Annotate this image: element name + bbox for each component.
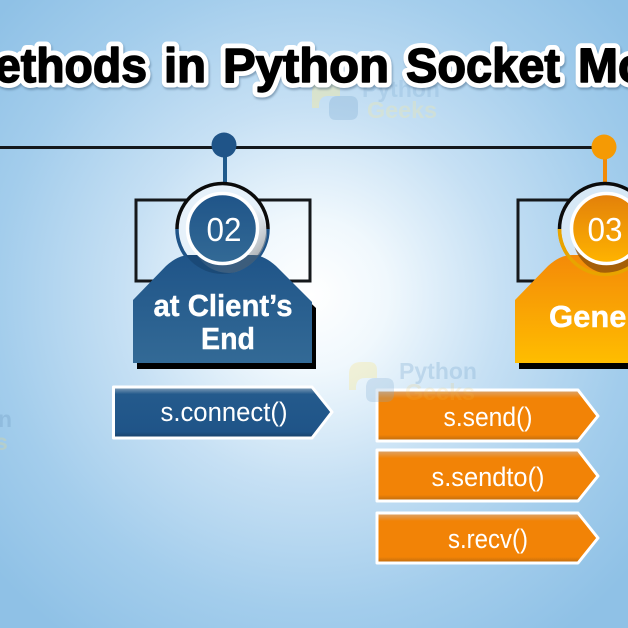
card label 02: at Client’s	[154, 288, 292, 323]
card label 02	[154, 288, 292, 356]
badge disc 03: 03	[588, 211, 622, 248]
title: Python	[223, 40, 389, 93]
badge disc 03	[572, 194, 628, 264]
watermark: top logo: Python	[362, 76, 440, 102]
method chip: s.send(): s.send()	[444, 402, 532, 432]
watermark: top logo: Geeks	[367, 97, 437, 123]
frame box 02	[136, 200, 310, 281]
method chip: s.connect(): s.connect()	[160, 397, 288, 427]
badge disc 02	[188, 194, 258, 264]
card shadow 03	[519, 255, 628, 369]
timeline	[0, 146, 595, 149]
watermark: left edge fragment	[0, 406, 12, 455]
watermark: top logo	[312, 76, 440, 123]
title: Socket	[406, 40, 560, 93]
badge ring 03	[558, 182, 628, 256]
card shadow 02	[137, 255, 316, 369]
title: Python	[223, 40, 389, 93]
connector: dot and stem 03	[592, 134, 616, 184]
ring lower arc 03	[558, 229, 628, 276]
title: Socket	[406, 40, 560, 93]
badge shadow 03	[574, 246, 628, 273]
method chip: s.recv()	[377, 513, 598, 563]
method chip: s.sendto()	[377, 450, 598, 501]
title: in	[164, 40, 206, 93]
step 03	[515, 134, 628, 369]
card 02	[133, 255, 312, 363]
badge shadow 02	[186, 210, 267, 274]
method chip: s.send()	[377, 390, 598, 441]
title	[0, 40, 628, 93]
method chip: s.sendto(): s.sendto()	[432, 462, 544, 492]
watermark: centre logo	[349, 358, 477, 405]
watermark: centre logo: Python	[399, 358, 477, 384]
watermark: centre logo: Geeks	[405, 379, 475, 405]
method chip: s.connect()	[114, 387, 332, 438]
card label 02: End	[201, 321, 255, 356]
method chip: s.recv(): s.recv()	[448, 524, 528, 554]
card 03	[515, 255, 628, 363]
connector: dot and stem 02	[212, 132, 236, 184]
title: in	[164, 40, 206, 93]
badge disc 02: 02	[206, 211, 242, 248]
badge ring 02	[175, 182, 270, 256]
step 02	[133, 132, 316, 369]
frame box 03	[518, 200, 628, 281]
